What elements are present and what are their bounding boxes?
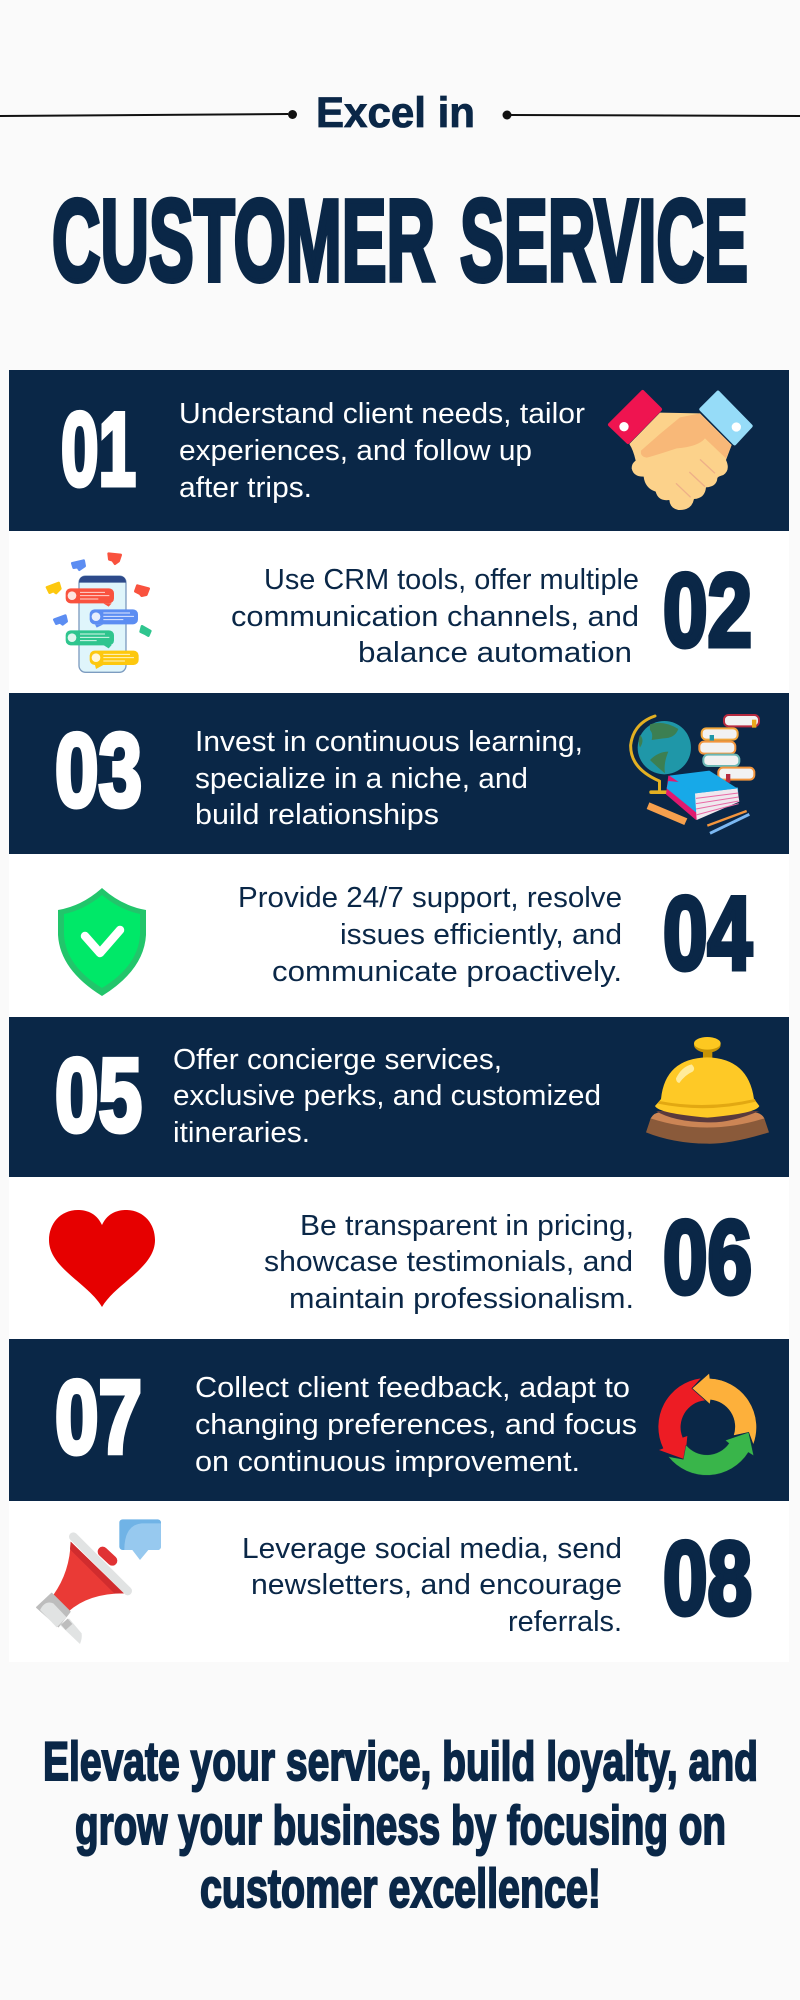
panel: step 6 [9, 1177, 789, 1339]
text step 7: Collect client feedback, adapt to [195, 1372, 630, 1404]
panel: step 8 [9, 1501, 789, 1662]
text step 8 [242, 1533, 622, 1638]
text step 3: specialize in a niche, and [195, 763, 528, 795]
text step 3: build relationships [195, 799, 439, 831]
panel: step 7 [9, 1339, 789, 1501]
text step 4: communicate proactively. [272, 956, 622, 988]
text step 5: itineraries. [173, 1117, 310, 1149]
number 02: 02 [663, 553, 752, 669]
text step 5: exclusive perks, and customized [173, 1080, 601, 1112]
icon: heart [49, 1210, 155, 1307]
text step 8: referrals. [508, 1606, 622, 1638]
text step 8: newsletters, and encourage [251, 1569, 622, 1601]
header line right [502, 110, 800, 120]
closing message: customer excellence! [200, 1857, 601, 1919]
text step 6: Be transparent in pricing, [300, 1210, 634, 1242]
panel: step 3 [9, 693, 789, 854]
icon: handshake [610, 392, 751, 510]
text step 2: Use CRM tools, offer multiple [264, 564, 639, 596]
text step 4 [238, 882, 622, 988]
text step 5 [173, 1044, 601, 1149]
panel: step 4 [9, 854, 789, 1017]
number 05: 05 [55, 1038, 142, 1154]
subtitle: Excel in [316, 89, 475, 137]
number 07: 07 [55, 1360, 142, 1476]
panel: step 2 [9, 531, 789, 693]
text step 4: Provide 24/7 support, resolve [238, 882, 622, 914]
text step 6 [264, 1210, 634, 1315]
title: CUSTOMER [52, 176, 435, 306]
number 06: 06 [663, 1200, 752, 1316]
icon: shield check [58, 888, 146, 996]
text step 1: experiences, and follow up [179, 435, 532, 467]
number 08: 08 [663, 1521, 752, 1637]
number 01: 01 [61, 392, 136, 508]
text step 1 [179, 398, 586, 504]
icon: megaphone [37, 1519, 161, 1644]
number 03: 03 [55, 713, 142, 829]
text step 2 [231, 564, 639, 669]
text step 2: balance automation [358, 637, 632, 669]
icon: service bell [646, 1037, 769, 1144]
text step 5: Offer concierge services, [173, 1044, 502, 1076]
text step 1: Understand client needs, tailor [179, 398, 586, 430]
panel: step 1 [9, 370, 789, 531]
text step 8: Leverage social media, send [242, 1533, 622, 1565]
text step 3: Invest in continuous learning, [195, 726, 583, 758]
number 04: 04 [663, 876, 752, 992]
icon: globe and books [631, 715, 759, 833]
text step 6: maintain professionalism. [289, 1283, 634, 1315]
text step 3 [195, 726, 583, 831]
icon: phone with chat bubbles [47, 554, 150, 672]
text step 6: showcase testimonials, and [264, 1246, 633, 1278]
text step 7: on continuous improvement. [195, 1446, 580, 1478]
text step 1: after trips. [179, 472, 312, 504]
closing message [43, 1730, 758, 1919]
text step 7: changing preferences, and focus [195, 1409, 637, 1441]
header line left [0, 110, 297, 119]
text step 4: issues efficiently, and [340, 919, 622, 951]
panel: step 5 [9, 1017, 789, 1177]
icon: cycle arrows [658, 1373, 757, 1475]
text step 7 [195, 1372, 637, 1478]
text step 2: communication channels, and [231, 601, 639, 633]
